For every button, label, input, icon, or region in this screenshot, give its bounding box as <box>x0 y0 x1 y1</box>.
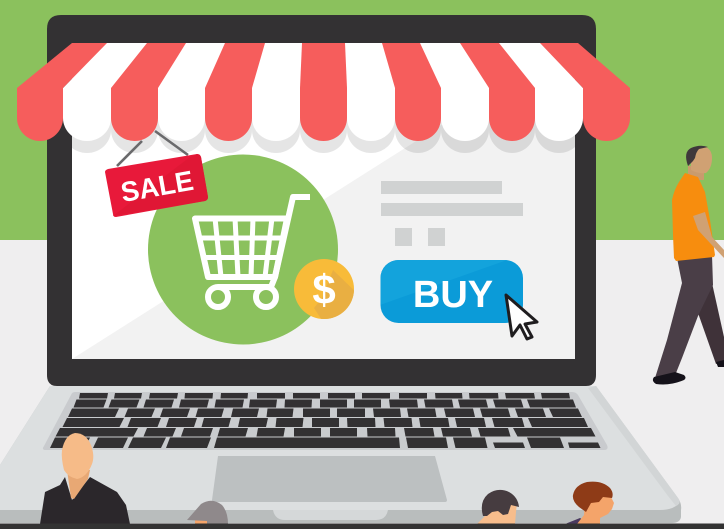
button highlight <box>380 260 507 278</box>
front leg <box>655 255 713 378</box>
green circle <box>148 154 338 344</box>
button body <box>380 260 523 323</box>
front notch <box>273 510 388 520</box>
left wheel <box>208 287 228 307</box>
screen diagonal shade <box>72 43 575 359</box>
awning <box>17 43 630 141</box>
head <box>62 433 93 479</box>
button text: BUY <box>413 274 493 316</box>
keyboard keys <box>50 393 600 448</box>
laptop deck <box>0 386 680 510</box>
basket grid <box>199 218 283 277</box>
arm <box>693 212 724 258</box>
red stripes <box>17 43 630 141</box>
keyboard well <box>43 392 608 450</box>
hanging strings <box>117 131 188 166</box>
seated person four <box>565 482 614 524</box>
buy button <box>380 259 523 323</box>
mouse cursor <box>506 295 537 339</box>
black shirt <box>40 477 130 524</box>
product text placeholders <box>381 181 523 246</box>
screen <box>72 43 575 359</box>
bottom dark strip <box>0 524 724 529</box>
sale sign <box>105 131 208 217</box>
sign shade <box>113 154 208 216</box>
laptop base shadow edge <box>0 386 681 523</box>
skin <box>477 503 517 524</box>
sign board <box>105 154 208 217</box>
deck right edge shade <box>588 386 680 506</box>
head <box>691 146 712 173</box>
front shoe <box>653 372 686 384</box>
back shoe <box>716 360 724 367</box>
walking man <box>653 146 724 384</box>
seated person one <box>40 433 130 524</box>
seated person two grey hat <box>187 501 228 524</box>
dollar sign: $ <box>312 266 336 313</box>
neck <box>67 470 90 499</box>
face and neck <box>577 495 614 524</box>
hair <box>573 482 613 512</box>
orange shirt <box>672 173 715 261</box>
coin disc <box>294 259 354 319</box>
shopping cart icon <box>195 197 310 307</box>
back leg <box>698 283 724 364</box>
screen bezel <box>47 15 596 386</box>
right wheel <box>256 287 276 307</box>
shirt <box>565 518 590 524</box>
hair <box>482 490 519 516</box>
green wall background <box>0 0 724 240</box>
hair <box>686 146 708 166</box>
white stripes <box>63 43 583 141</box>
sign text: SALE <box>118 165 196 208</box>
neck <box>688 166 704 180</box>
seated person three <box>477 490 519 524</box>
handle and frame <box>218 197 310 287</box>
hat <box>187 501 228 524</box>
awning shadow <box>72 120 575 153</box>
coin shade <box>314 270 354 319</box>
light floor background <box>0 240 724 529</box>
face <box>195 520 208 524</box>
basket outline <box>195 218 287 277</box>
dollar coin <box>294 259 354 319</box>
touchpad <box>212 456 447 502</box>
